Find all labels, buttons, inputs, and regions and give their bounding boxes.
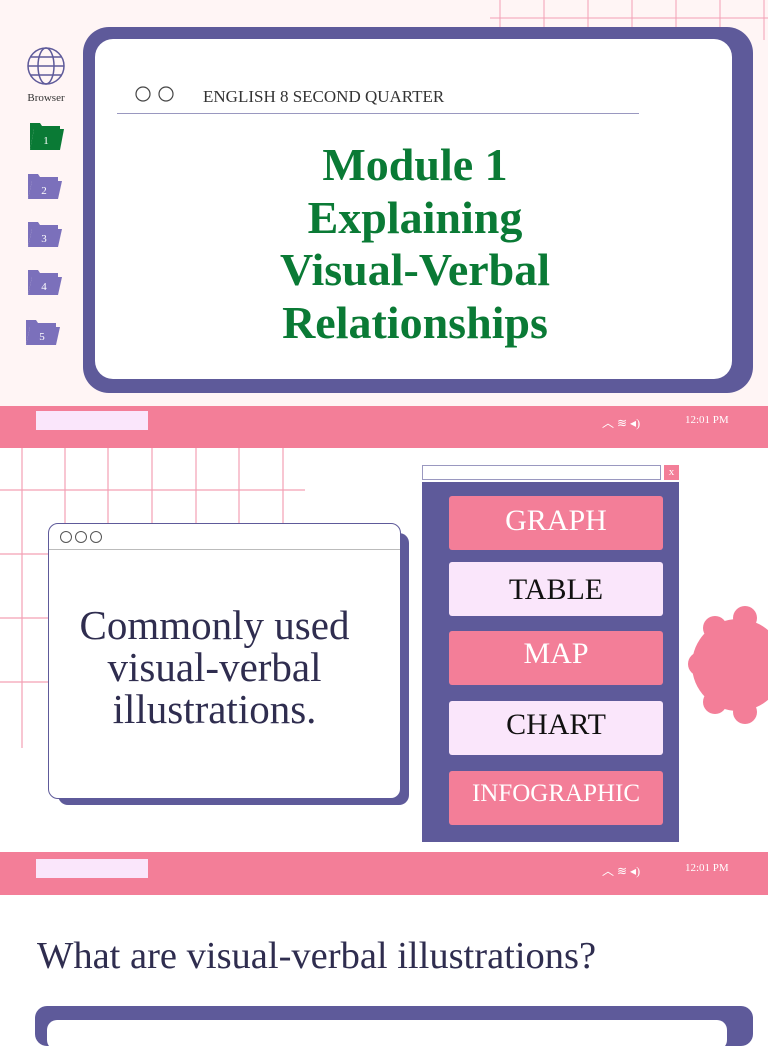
bottom panel <box>35 1006 753 1046</box>
title: Explaining <box>308 192 522 242</box>
heading: what are: What are visual-verbal illustrations? <box>37 935 596 977</box>
button: infographic: INFOGRAPHIC <box>472 780 640 807</box>
title: Module 1 <box>322 139 508 190</box>
taskbar 1: ︿ ≋ ◂) <box>602 416 640 430</box>
button: table: TABLE <box>509 573 603 606</box>
button: map: MAP <box>523 637 589 670</box>
folder icons: 3 <box>41 233 47 245</box>
panel: commonly used window <box>48 523 409 805</box>
folder icons: 1 <box>43 135 49 147</box>
button: chart <box>449 701 663 755</box>
icon: browser globe <box>27 47 65 104</box>
folder icons <box>26 123 64 345</box>
panel: list window: x <box>669 466 674 478</box>
top section background <box>0 0 768 407</box>
button: infographic <box>449 771 663 825</box>
icon: browser globe: Browser <box>27 92 65 104</box>
title <box>280 139 550 348</box>
taskbar 2: 12:01 PM <box>685 862 729 874</box>
text: commonly used <box>80 602 349 732</box>
button: table <box>449 562 663 616</box>
taskbar 2: ︿ ≋ ◂) <box>602 864 640 878</box>
button: graph <box>449 496 663 550</box>
taskbar 2 <box>0 852 768 895</box>
button: chart: CHART <box>506 708 606 741</box>
text: commonly used: visual-verbal <box>107 644 322 690</box>
taskbar 1: 12:01 PM <box>685 414 729 426</box>
window dots <box>135 86 174 102</box>
panel: title window <box>83 27 753 393</box>
button: graph: GRAPH <box>505 504 607 537</box>
folder icons: 4 <box>41 281 47 293</box>
text: commonly used: illustrations. <box>113 686 316 732</box>
taskbar 1 <box>0 406 768 448</box>
button: map <box>449 631 663 685</box>
decorative gear blob <box>688 606 768 724</box>
panel: list window <box>422 465 679 842</box>
grid decoration top right <box>490 0 768 40</box>
grid decoration middle <box>0 448 305 748</box>
folder icons: 2 <box>41 185 47 197</box>
folder icons: 5 <box>39 331 45 343</box>
subtitle: ENGLISH 8 SECOND QUARTER <box>203 87 444 106</box>
text: commonly used: Commonly used <box>80 602 349 648</box>
title: Relationships <box>282 296 548 348</box>
title: Visual-Verbal <box>280 244 550 295</box>
